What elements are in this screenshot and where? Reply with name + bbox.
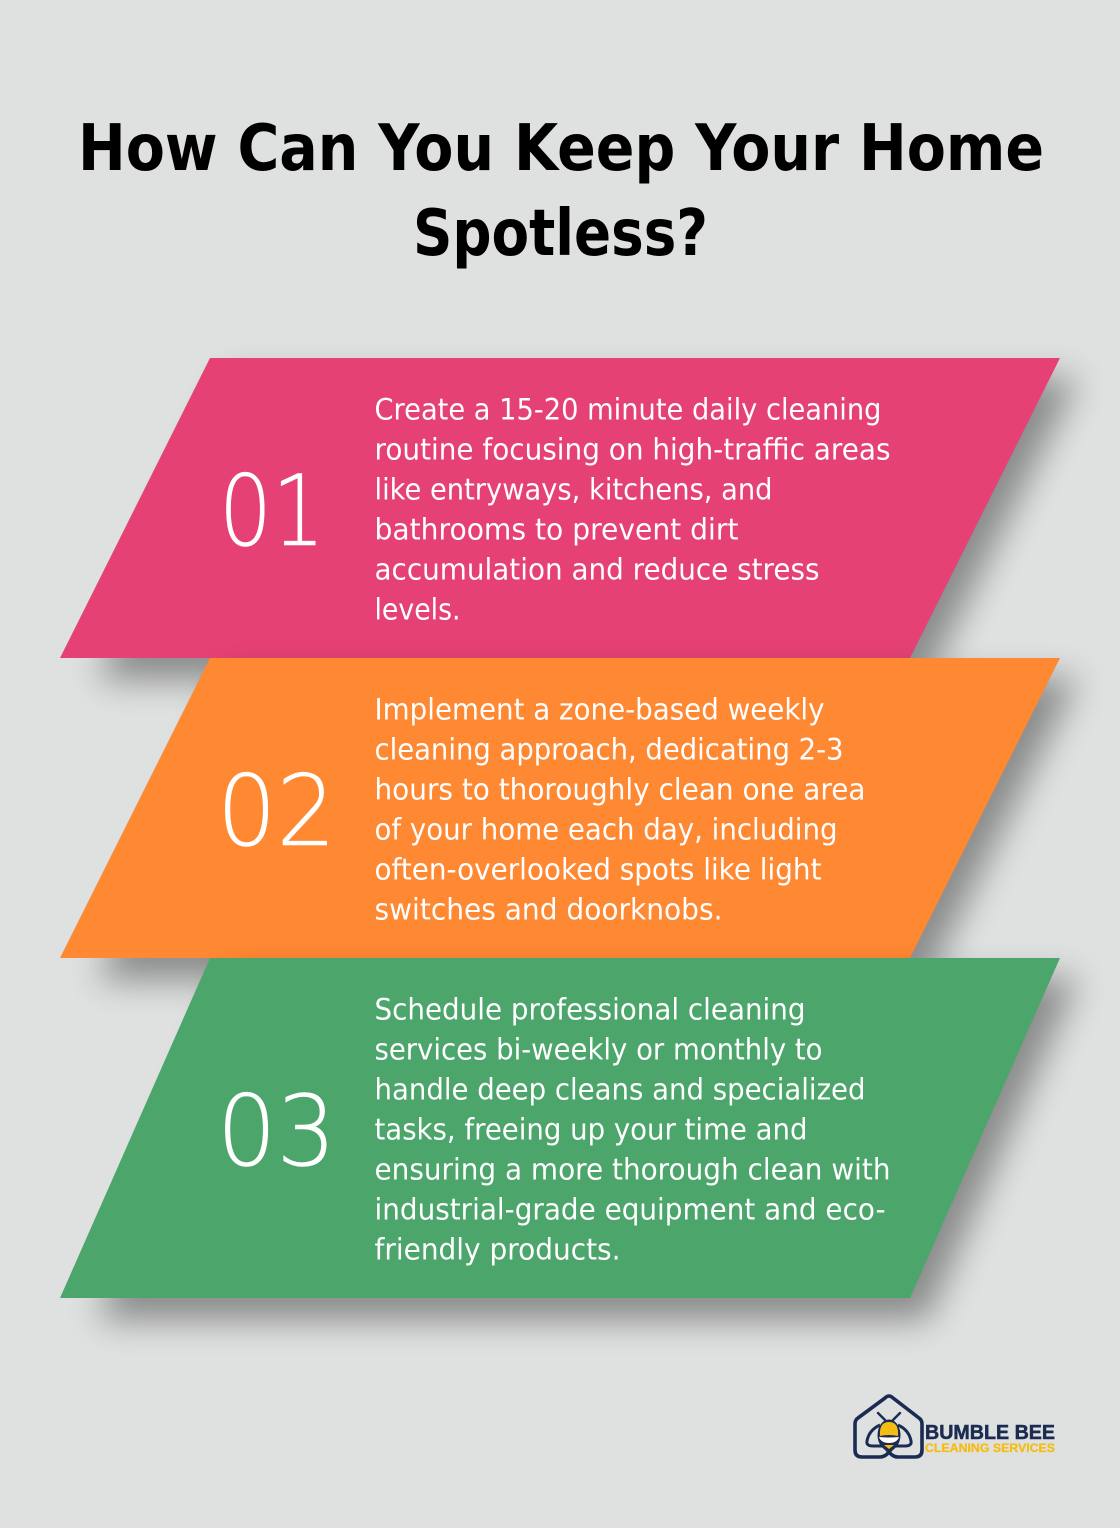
step 3 text: industrial-grade equipment and eco- xyxy=(374,1192,886,1226)
step 1 text: routine focusing on high-traffic areas xyxy=(374,432,890,466)
step 2 text: cleaning approach, dedicating 2-3 xyxy=(374,732,844,766)
step 1 text xyxy=(374,392,890,626)
logo: Bumble Bee Cleaning Services xyxy=(855,1396,1055,1457)
step 3 text: tasks, freeing up your time and xyxy=(374,1112,808,1146)
step 3 number: 03 xyxy=(217,1075,336,1189)
step 1 band xyxy=(60,358,1060,658)
step 2 text: Implement a zone-based weekly xyxy=(374,692,824,726)
title xyxy=(78,112,1044,271)
panel: step 2 xyxy=(60,658,1078,980)
logo tagline: CLEANING SERVICES xyxy=(925,1441,1055,1455)
panel: step 3 xyxy=(60,958,1078,1320)
step 1 text: Create a 15-20 minute daily cleaning xyxy=(374,392,882,426)
step 3 text: handle deep cleans and specialized xyxy=(374,1072,866,1106)
step 2 text: hours to thoroughly clean one area xyxy=(374,772,866,806)
step 2 text: of your home each day, including xyxy=(374,812,838,846)
panel: step 1 xyxy=(60,358,1078,680)
step 3 text xyxy=(374,992,890,1266)
step 3 text: friendly products. xyxy=(374,1232,620,1266)
icon: house outline with bee xyxy=(855,1396,922,1457)
step 1 text: levels. xyxy=(374,592,460,626)
step 1 number: 01 xyxy=(219,455,325,569)
step 1 text: bathrooms to prevent dirt xyxy=(374,512,738,546)
step 1 text: accumulation and reduce stress xyxy=(374,552,820,586)
logo wordmark: BUMBLE BEE xyxy=(925,1422,1055,1444)
step 3 text: services bi-weekly or monthly to xyxy=(374,1032,822,1066)
step 3 band xyxy=(60,958,1060,1298)
step 2 text: often-overlooked spots like light xyxy=(374,852,822,886)
title: Spotless? xyxy=(413,197,708,271)
step 3 text: ensuring a more thorough clean with xyxy=(374,1152,890,1186)
step 2 text: switches and doorknobs. xyxy=(374,892,722,926)
step 1 text: like entryways, kitchens, and xyxy=(374,472,772,506)
step 3 text: Schedule professional cleaning xyxy=(374,992,806,1026)
step 2 band xyxy=(60,658,1060,958)
step 2 number: 02 xyxy=(217,755,336,869)
step 2 text xyxy=(374,692,866,926)
